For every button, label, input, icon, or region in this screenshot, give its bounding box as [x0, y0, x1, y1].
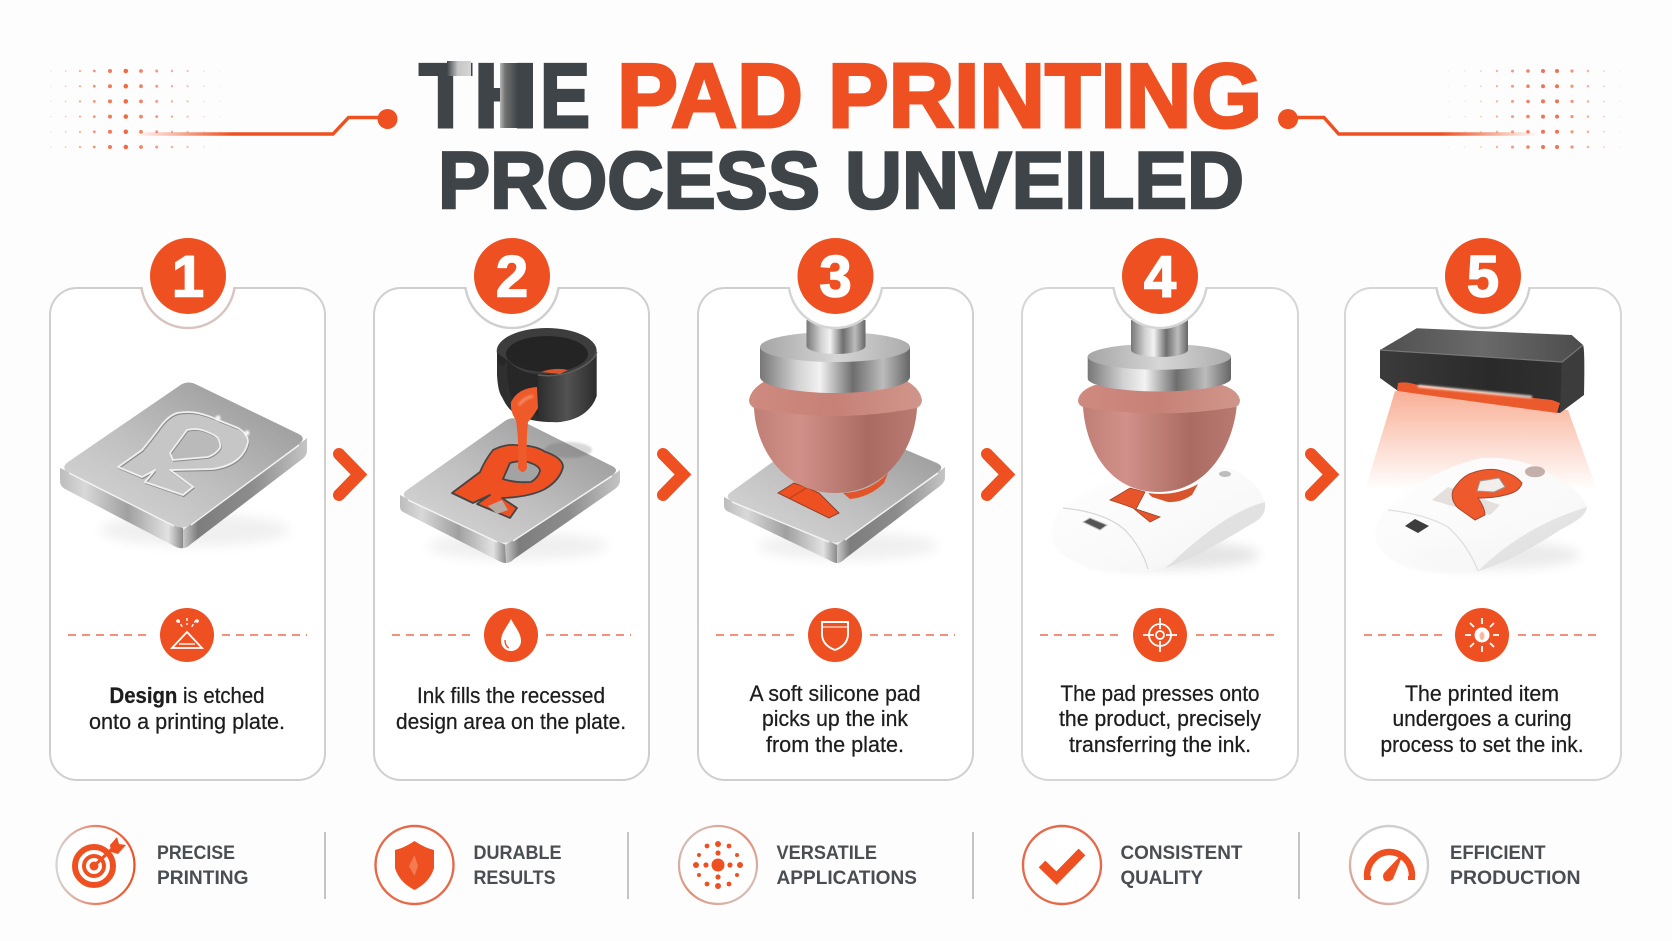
number badge 3 [783, 232, 888, 328]
description: the product, precisely [1059, 706, 1261, 731]
benefit: efficient production: EFFICIENT [1450, 842, 1546, 864]
description [750, 681, 920, 757]
title: UNVEILED [845, 136, 1244, 226]
arrow 1 [339, 454, 359, 495]
arrow 2 [663, 454, 683, 495]
decoration: right dot grid and connector [1278, 71, 1620, 148]
description [1059, 681, 1261, 757]
number badge 4: 4 [1144, 244, 1176, 310]
benefit: consistent quality [1023, 826, 1243, 904]
benefit: consistent quality: QUALITY [1120, 867, 1203, 889]
benefit: consistent quality: CONSISTENT [1120, 842, 1243, 864]
divider line [1040, 634, 1279, 636]
description: The printed item [1405, 681, 1559, 706]
panel: step 2 [374, 232, 649, 780]
benefit: efficient production: PRODUCTION [1450, 867, 1580, 889]
benefit: precise printing: PRINTING [157, 867, 248, 889]
icon: crosshair [1133, 608, 1187, 662]
number badge 2 [460, 232, 564, 328]
title: PAD [617, 46, 803, 147]
description: Ink fills the recessed [417, 683, 605, 708]
divider line [68, 634, 307, 636]
illustration: curing lamp over printed product [1365, 328, 1597, 573]
number badge 1 [136, 232, 240, 328]
title: PRINTING [828, 46, 1262, 147]
illustration: silicone pad on plate [724, 320, 945, 563]
benefit: durable results: DURABLE [474, 842, 562, 864]
separator [627, 832, 629, 899]
divider line [716, 634, 955, 636]
number badge 2: 2 [496, 244, 528, 310]
description: onto a printing plate. [89, 709, 285, 734]
icon: silicone pad [808, 608, 862, 662]
benefit: efficient production [1350, 826, 1580, 904]
divider line [392, 634, 631, 636]
divider line [1364, 634, 1601, 636]
panel: step 3 [698, 232, 973, 780]
benefit: versatile applications [679, 826, 917, 904]
number badge 5 [1431, 232, 1535, 328]
description [396, 683, 626, 734]
title: PROCESS [438, 136, 820, 226]
benefit: durable results: RESULTS [474, 867, 556, 889]
description: transferring the ink. [1069, 732, 1251, 757]
icon: ink drop [484, 608, 538, 662]
separator [972, 832, 974, 899]
description: Design is etched [110, 683, 264, 708]
title: T [419, 46, 472, 147]
title [419, 46, 1262, 226]
arrow 4 [1311, 454, 1331, 495]
number badge 1: 1 [172, 244, 204, 310]
title: H [474, 46, 537, 147]
illustration: etched metal plate [60, 383, 307, 548]
icon: etched triangle [160, 608, 214, 662]
illustration: ink pouring onto plate [400, 328, 620, 563]
arrow 3 [987, 454, 1007, 495]
panel: step 5 [1345, 232, 1621, 780]
benefit: precise printing [56, 826, 248, 904]
description: process to set the ink. [1380, 732, 1584, 757]
panel: step 4 [1022, 232, 1298, 780]
benefit: durable results [376, 826, 562, 904]
number badge 5: 5 [1467, 244, 1499, 310]
decoration: left dot grid and connector [51, 71, 398, 148]
description: undergoes a curing [1392, 706, 1572, 731]
description: A soft silicone pad [750, 681, 920, 706]
title: E [540, 46, 590, 147]
description: picks up the ink [762, 706, 909, 731]
description: from the plate. [766, 732, 904, 757]
description: design area on the plate. [396, 709, 626, 734]
icon: sun [1455, 608, 1509, 662]
description: The pad presses onto [1060, 681, 1260, 706]
panel: step 1 [50, 232, 325, 780]
benefit: versatile applications: APPLICATIONS [776, 867, 917, 889]
benefit: versatile applications: VERSATILE [776, 842, 877, 864]
number badge 4 [1108, 232, 1212, 328]
description [1380, 681, 1584, 757]
benefit: precise printing: PRECISE [157, 842, 235, 864]
ink cup [497, 353, 595, 422]
number badge 3: 3 [819, 244, 852, 310]
separator [1298, 832, 1300, 899]
illustration: pad pressing onto product [1052, 320, 1265, 572]
separator [324, 832, 326, 899]
description [89, 683, 285, 734]
